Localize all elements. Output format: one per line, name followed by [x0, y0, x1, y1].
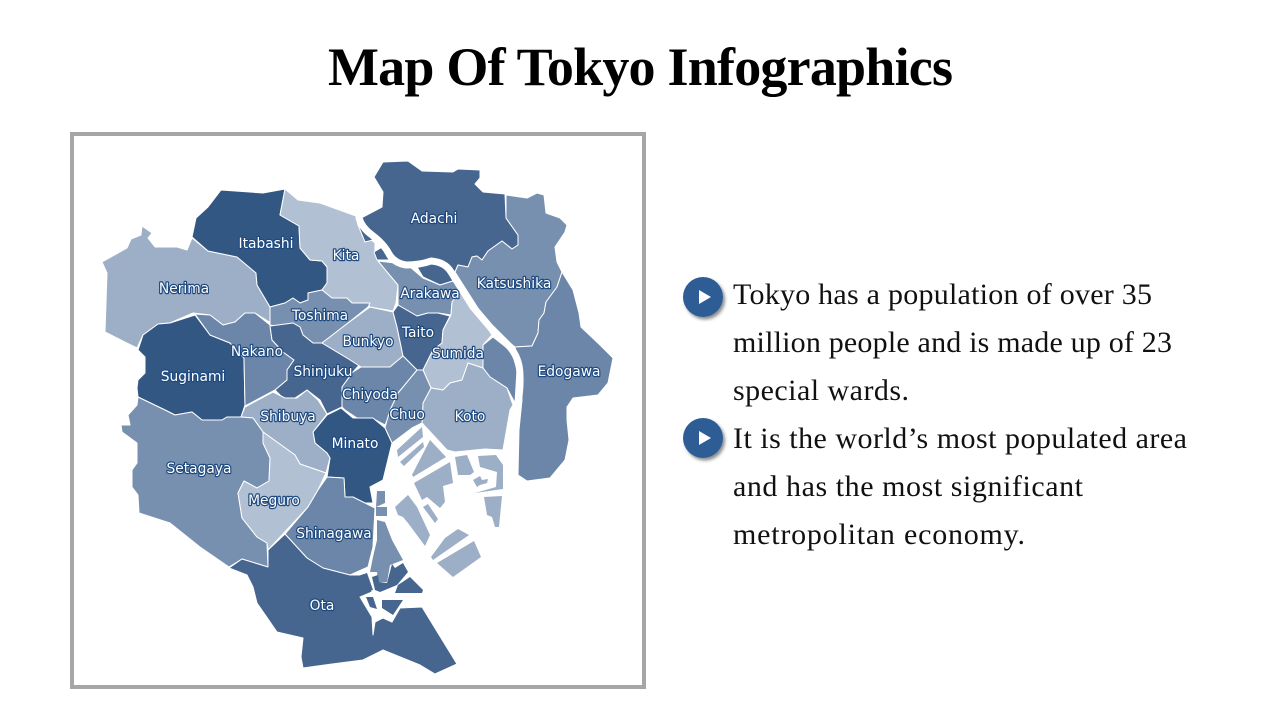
ward name labels: Taito [401, 325, 434, 341]
ward name labels: Katsushika [477, 276, 551, 292]
ward: Nakano [195, 313, 294, 406]
ward name labels: Meguro [248, 493, 300, 509]
ward: Chuo [385, 370, 431, 443]
text block: economy: metropolitan economy. [733, 518, 1025, 551]
ward name labels [159, 211, 600, 614]
ward: Adachi west piece [358, 225, 373, 242]
ward name labels: Shibuya [260, 409, 316, 425]
ward: Katsushika [455, 193, 567, 347]
ward: Suginami [137, 315, 245, 420]
river [359, 218, 520, 480]
ward: Shinagawa [285, 477, 375, 575]
ward name labels: Edogawa [538, 364, 600, 380]
ward name labels: Setagaya [167, 461, 231, 477]
ward: Shinjuku [270, 323, 362, 414]
text block: economy: It is the world’s most populated area [733, 422, 1187, 455]
ward name labels: Minato [332, 436, 378, 452]
ward: Adachi south piece [417, 261, 453, 285]
ward: Bunkyo [322, 307, 403, 367]
ward: Itabashi [192, 189, 327, 307]
ward: Setagaya [121, 397, 270, 567]
text block: population: million people and is made up of 23 [733, 326, 1172, 359]
ward: Kita east piece [374, 247, 390, 260]
ward name labels: Bunkyo [342, 334, 394, 350]
ward: Koto [422, 363, 513, 452]
ward name labels: Koto [455, 409, 485, 425]
text block: population [733, 278, 1172, 407]
text block: population: special wards. [733, 374, 909, 407]
ward name labels: Suginami [161, 369, 225, 385]
ward: Arakawa [378, 261, 461, 316]
ward name labels: Adachi [411, 211, 457, 227]
ward: Taito [393, 305, 450, 370]
ward name labels: Shinagawa [296, 526, 372, 542]
text block: population: Tokyo has a population of over 35 [733, 278, 1152, 311]
ward name labels: Kita [333, 248, 359, 264]
ward name labels: Shinjuku [294, 364, 352, 380]
Koto bay islands [395, 427, 503, 577]
ward: Adachi [360, 161, 518, 272]
ward name labels: Arakawa [400, 286, 460, 302]
ward name labels: Ota [310, 598, 334, 614]
ward: Sumida [423, 290, 492, 390]
ward: Koto north piece [483, 337, 517, 403]
ward name labels: Sumida [432, 346, 484, 362]
text block: economy: and has the most significant [733, 470, 1084, 503]
ward name labels: Chuo [389, 407, 425, 423]
ward: Kita [280, 189, 398, 311]
ward: Shibuya [241, 390, 330, 473]
ward: Meguro [238, 432, 326, 550]
ward: Toshima [270, 290, 370, 343]
ward: Minato [313, 408, 392, 503]
ward name labels: Chiyoda [342, 387, 398, 403]
map of Tokyo wards [102, 161, 613, 674]
text block: economy [733, 422, 1187, 551]
panel: map frame [72, 134, 644, 687]
ward: Edogawa [515, 272, 613, 481]
ward: Ota [229, 534, 457, 674]
ward: Ota bay islands [355, 563, 423, 615]
ward: Shinagawa bay strips [370, 491, 403, 582]
icon: bullet play 1 [683, 277, 723, 317]
icon: bullet play 2 [683, 418, 723, 458]
ward name labels: Nerima [159, 281, 209, 297]
ward name labels: Nakano [231, 344, 283, 360]
ward: Chiyoda [342, 356, 417, 425]
title: Map Of Tokyo Infographics [328, 37, 953, 97]
ward name labels: Itabashi [239, 236, 293, 252]
ward name labels: Toshima [291, 308, 348, 324]
ward: Nerima [102, 226, 271, 348]
